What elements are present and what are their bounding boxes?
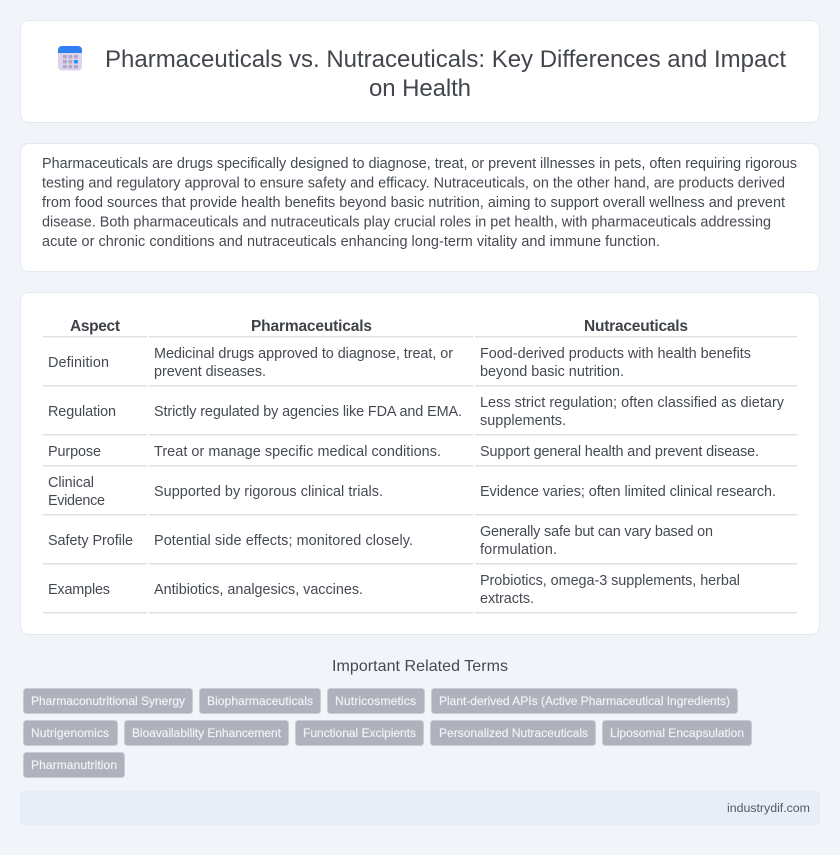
row: safety profile: Potential side effects; monitored closely. xyxy=(154,533,413,549)
tag xyxy=(24,752,124,778)
tag xyxy=(200,688,320,714)
icon: calendar xyxy=(58,46,82,70)
row: purpose: Support general health and prevent disease. xyxy=(480,444,759,460)
tag xyxy=(24,688,192,714)
tag: Personalized Nutraceuticals xyxy=(439,726,588,740)
row: examples: Probiotics, omega-3 supplements, herbal xyxy=(480,573,740,589)
tag: Nutrigenomics xyxy=(31,726,109,740)
tag: Biopharmaceuticals xyxy=(207,694,313,708)
table header: Pharmaceuticals xyxy=(251,318,372,335)
panel: intro text: testing and regulatory approval to ensure safety and efficacy. Nutraceuticals, on the other hand, are products derived xyxy=(42,176,785,192)
row: purpose: Purpose xyxy=(48,444,101,460)
table rules xyxy=(43,336,797,614)
row: regulation: Strictly regulated by agencies like FDA and EMA. xyxy=(154,404,462,420)
row: safety profile: Safety Profile xyxy=(48,533,133,549)
table header: Nutraceuticals xyxy=(584,318,688,335)
panel: comparison table xyxy=(20,292,820,634)
tag: Pharmanutrition xyxy=(31,758,117,772)
title xyxy=(105,46,786,102)
row: regulation: Less strict regulation; often classified as dietary xyxy=(480,395,785,411)
row: clinical evidence xyxy=(48,475,776,509)
row: clinical evidence: Evidence xyxy=(48,493,105,509)
tag: Plant-derived APIs (Active Pharmaceutical Ingredients) xyxy=(439,694,730,708)
row: safety profile: Generally safe but can vary based on xyxy=(480,524,713,540)
row: clinical evidence: Supported by rigorous clinical trials. xyxy=(154,484,383,500)
table header: Aspect xyxy=(70,318,120,335)
row: examples: Examples xyxy=(48,582,110,598)
row: safety profile: formulation. xyxy=(480,542,557,558)
row: regulation xyxy=(48,395,785,429)
tag xyxy=(432,688,738,714)
title: Pharmaceuticals vs. Nutraceuticals: Key Differences and Impact xyxy=(105,46,786,73)
table header xyxy=(70,318,688,335)
tag list xyxy=(24,688,752,778)
row: definition: Food-derived products with health benefits xyxy=(480,346,751,362)
tag xyxy=(124,720,288,746)
tag xyxy=(296,720,424,746)
tag xyxy=(328,688,424,714)
row: examples: extracts. xyxy=(480,591,534,607)
row: definition: Definition xyxy=(48,355,109,371)
tag: Functional Excipients xyxy=(303,726,416,740)
row: purpose: Treat or manage specific medical conditions. xyxy=(154,444,441,460)
row: examples xyxy=(48,573,740,607)
row: safety profile xyxy=(48,524,713,558)
footer: industrydif.com xyxy=(727,801,810,815)
tag xyxy=(602,720,752,746)
panel: intro text: Pharmaceuticals are drugs specifically designed to diagnose, treat, or prevent illnesses in pets, often requiring rigorous xyxy=(42,156,797,172)
row: purpose xyxy=(48,444,759,460)
tag: Bioavailability Enhancement xyxy=(132,726,282,740)
row: regulation: supplements. xyxy=(480,413,566,429)
heading: important related terms: Important Related Terms xyxy=(332,658,508,675)
panel: intro text: disease. Both pharmaceuticals and nutraceuticals play crucial roles in pet health, with pharmaceuticals addressing xyxy=(42,214,771,230)
row: definition: Medicinal drugs approved to diagnose, treat, or xyxy=(154,346,453,362)
tag: Nutricosmetics xyxy=(335,694,416,708)
tag xyxy=(430,720,596,746)
row: clinical evidence: Clinical xyxy=(48,475,94,491)
panel: intro text: acute or chronic conditions and nutraceuticals enhancing long-term vitality and immune function. xyxy=(42,234,660,250)
footer xyxy=(20,791,820,825)
row: regulation: Regulation xyxy=(48,404,116,420)
header card xyxy=(20,20,820,122)
panel: intro text xyxy=(20,144,820,272)
row: clinical evidence: Evidence varies; often limited clinical research. xyxy=(480,484,776,500)
title: on Health xyxy=(369,75,471,102)
tag xyxy=(24,720,118,746)
row: examples: Antibiotics, analgesics, vaccines. xyxy=(154,582,363,598)
panel: intro text: from food sources that provide health benefits beyond basic nutrition, aiming to support overall wellness and prevent xyxy=(42,195,785,211)
row: definition xyxy=(48,346,751,380)
tag: Liposomal Encapsulation xyxy=(610,726,744,740)
row: definition: beyond basic nutrition. xyxy=(480,364,624,380)
row: definition: prevent diseases. xyxy=(154,364,266,380)
tag: Pharmaconutritional Synergy xyxy=(31,694,185,708)
